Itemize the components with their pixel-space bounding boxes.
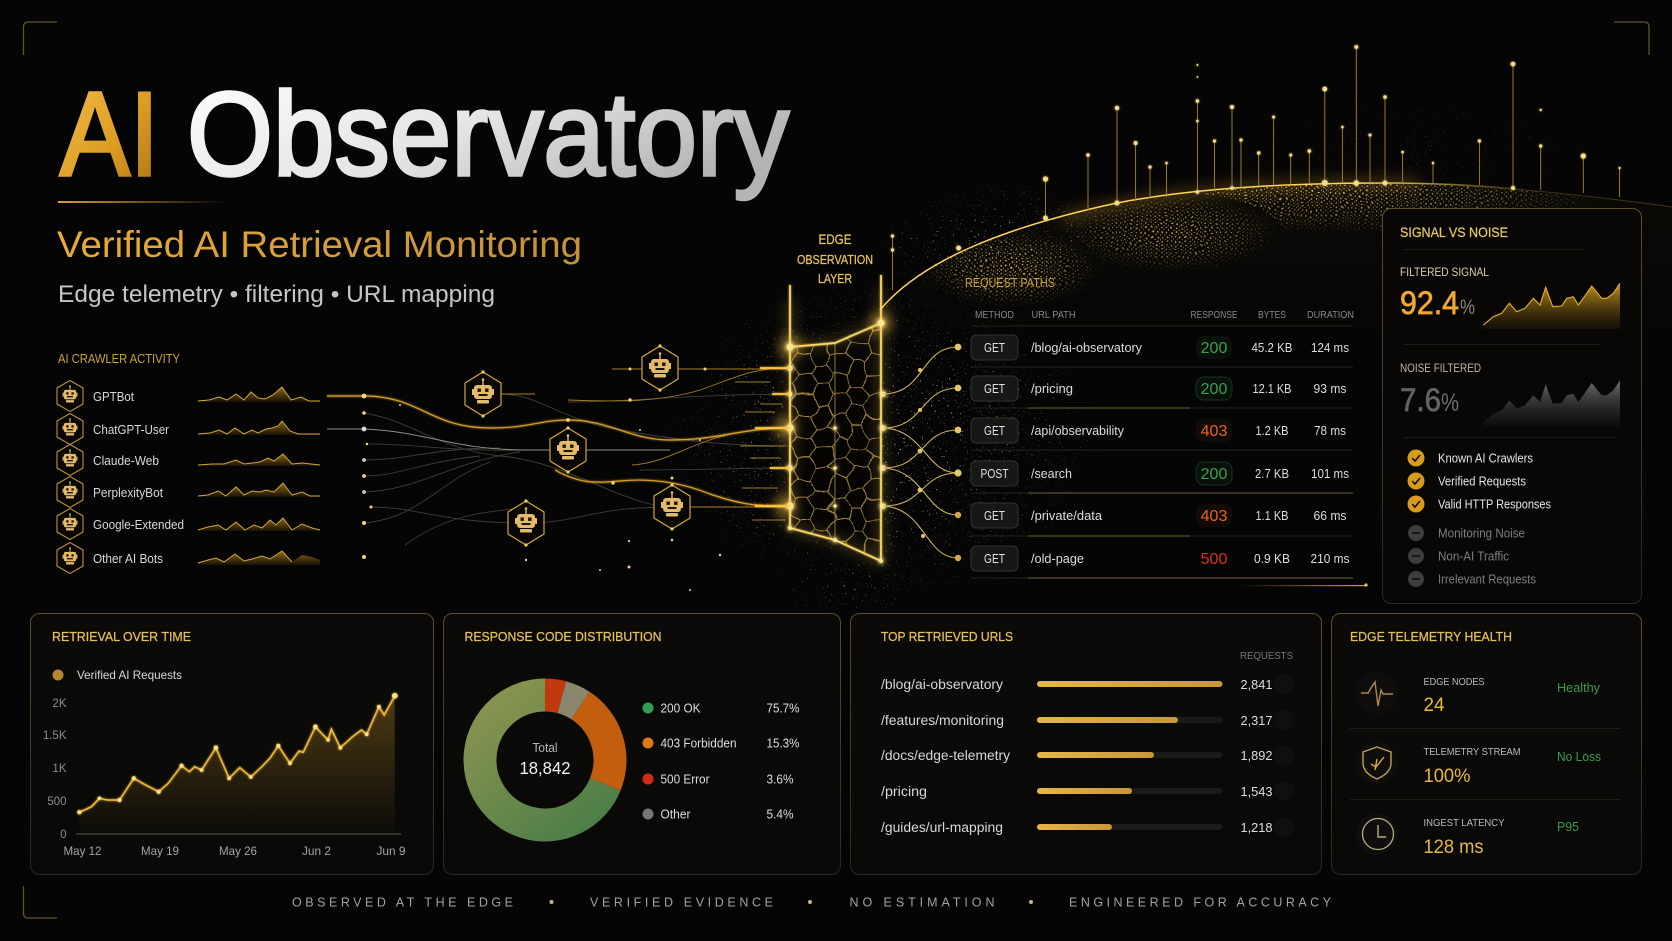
panel: response code distribution: RESPONSE CODE DISTRIBUTION bbox=[464, 629, 662, 644]
footer tagline: NO ESTIMATION bbox=[850, 896, 994, 910]
noise filtered: % bbox=[1441, 389, 1459, 417]
crawler flow lines bbox=[327, 368, 790, 545]
title: Observatory bbox=[187, 68, 789, 201]
table row 6: 210 ms bbox=[1310, 552, 1350, 566]
url row 5: /guides/url-mapping bbox=[881, 820, 1003, 835]
panel: edge telemetry health bbox=[1332, 614, 1642, 874]
crawler row: ChatGPT-User: ChatGPT-User bbox=[93, 422, 170, 437]
url row 1 bbox=[881, 674, 1294, 694]
url row 2: /features/monitoring bbox=[881, 713, 1004, 728]
donut chart bbox=[480, 695, 610, 825]
checklist: Irrelevant Requests bbox=[1438, 572, 1536, 586]
health row: ingest latency: P95 bbox=[1557, 820, 1579, 834]
filtered signal: 92.4 bbox=[1400, 285, 1459, 321]
edge observation layer label: EDGE bbox=[818, 231, 852, 247]
table row 4 bbox=[971, 461, 1349, 486]
donut legend: 75.7% bbox=[766, 702, 800, 716]
edge observation layer label: LAYER bbox=[818, 272, 852, 286]
request paths table bbox=[965, 276, 1368, 587]
table row 1: 124 ms bbox=[1311, 341, 1349, 355]
table row 4: 200 bbox=[1201, 466, 1227, 483]
table row 4: POST bbox=[980, 467, 1009, 481]
filtered signal: FILTERED SIGNAL bbox=[1400, 267, 1490, 279]
url row 2 bbox=[881, 710, 1294, 730]
panel: edge telemetry health: EDGE TELEMETRY HEALTH bbox=[1350, 629, 1512, 644]
table row 4: /search bbox=[1031, 466, 1072, 481]
health row: telemetry stream: No Loss bbox=[1557, 750, 1601, 764]
url row 1: 2,841 bbox=[1240, 677, 1272, 692]
health row: edge nodes: 24 bbox=[1424, 695, 1445, 716]
checklist: Valid HTTP Responses bbox=[1438, 498, 1551, 512]
donut legend: 5.4% bbox=[766, 808, 794, 822]
edge observation layer label: OBSERVATION bbox=[797, 253, 873, 267]
table heading: REQUEST PATHS bbox=[965, 276, 1055, 290]
y axis labels bbox=[43, 698, 67, 841]
checklist: Monitoring Noise bbox=[1438, 526, 1525, 540]
noise filtered: NOISE FILTERED bbox=[1400, 363, 1481, 375]
table row 4: 2.7 KB bbox=[1255, 467, 1289, 481]
globe horizon with data spikes bbox=[658, 44, 1672, 618]
subtitle: Verified AI Retrieval Monitoring bbox=[57, 224, 582, 265]
x axis labels: May 12 bbox=[64, 844, 102, 858]
table row 6: 500 bbox=[1201, 551, 1227, 568]
table row 3: 1.2 KB bbox=[1256, 424, 1288, 438]
health row: telemetry stream: 100% bbox=[1424, 766, 1471, 787]
table row 4: 101 ms bbox=[1311, 467, 1349, 481]
table row 5: 66 ms bbox=[1314, 509, 1346, 523]
table row 6: /old-page bbox=[1031, 551, 1084, 566]
table row 6: GET bbox=[984, 552, 1005, 566]
edge observation gate bbox=[755, 275, 895, 570]
filtered signal: % bbox=[1460, 296, 1475, 319]
health row: ingest latency: INGEST LATENCY bbox=[1424, 817, 1504, 829]
url row 4: /pricing bbox=[881, 784, 927, 799]
table row 2 bbox=[971, 376, 1346, 401]
y axis labels: 500 bbox=[47, 796, 66, 808]
donut legend: 500 Error bbox=[660, 772, 710, 786]
connectors from gate to table bbox=[883, 344, 962, 561]
panel: top retrieved urls: TOP RETRIEVED URLS bbox=[881, 629, 1013, 644]
panel: top retrieved urls: REQUESTS bbox=[1240, 650, 1293, 662]
table row 3: 403 bbox=[1201, 423, 1227, 440]
table row 1: 45.2 KB bbox=[1252, 341, 1292, 355]
table row 5: 1.1 KB bbox=[1256, 509, 1288, 523]
table column headers: RESPONSE bbox=[1190, 310, 1238, 321]
footer tagline bbox=[292, 896, 1332, 910]
tagline: Edge telemetry • filtering • URL mapping bbox=[58, 281, 495, 308]
x axis labels: May 19 bbox=[141, 844, 179, 858]
table row 2: GET bbox=[984, 382, 1005, 396]
x axis labels: May 26 bbox=[219, 844, 257, 858]
noise filtered: 7.6 bbox=[1400, 382, 1441, 418]
crawler row: PerplexityBot: PerplexityBot bbox=[93, 485, 163, 500]
y axis labels: 1.5K bbox=[43, 730, 67, 742]
legend: Verified AI Requests bbox=[77, 668, 182, 682]
donut legend: 403 Forbidden bbox=[660, 736, 737, 750]
panel: retrieval over time bbox=[30, 614, 434, 874]
table row 2: 12.1 KB bbox=[1252, 382, 1292, 396]
footer tagline: OBSERVED AT THE EDGE bbox=[292, 896, 513, 910]
donut legend bbox=[642, 702, 800, 822]
checklist bbox=[1408, 450, 1551, 587]
health row: edge nodes: Healthy bbox=[1557, 681, 1601, 695]
panel: top retrieved urls bbox=[850, 614, 1322, 874]
crawler row: Claude-Web bbox=[57, 444, 320, 476]
donut total bbox=[520, 741, 570, 778]
noise filtered bbox=[1400, 363, 1620, 426]
donut total: Total bbox=[532, 741, 558, 755]
table row 3 bbox=[971, 418, 1346, 443]
y axis labels: 2K bbox=[52, 698, 67, 710]
footer tagline: VERIFIED EVIDENCE bbox=[590, 896, 773, 910]
crawler row: Claude-Web: Claude-Web bbox=[93, 453, 159, 468]
checklist: Known AI Crawlers bbox=[1438, 452, 1533, 466]
table row 3: /api/observability bbox=[1031, 423, 1124, 438]
url row 2: 2,317 bbox=[1240, 713, 1272, 728]
line chart bbox=[76, 693, 401, 834]
table row 1 bbox=[971, 335, 1349, 360]
y axis labels: 1K bbox=[52, 763, 67, 775]
table row 5: 403 bbox=[1201, 508, 1227, 525]
table row 5: GET bbox=[984, 509, 1005, 523]
crawler row: Google-Extended bbox=[57, 508, 320, 540]
section label: AI crawler activity: AI CRAWLER ACTIVITY bbox=[58, 352, 181, 366]
table row 6: 0.9 KB bbox=[1254, 552, 1290, 566]
table row 2: 200 bbox=[1201, 381, 1227, 398]
robot hexagon nodes bbox=[465, 344, 690, 547]
title underline bbox=[58, 201, 226, 203]
donut legend: 15.3% bbox=[766, 736, 800, 750]
table row 3: GET bbox=[984, 424, 1005, 438]
url row 3 bbox=[881, 745, 1294, 765]
url row 5: 1,218 bbox=[1240, 820, 1272, 835]
health row: edge nodes: EDGE NODES bbox=[1424, 676, 1484, 688]
table row 2: /pricing bbox=[1031, 381, 1073, 396]
table row 1: GET bbox=[984, 341, 1005, 355]
health row: telemetry stream: TELEMETRY STREAM bbox=[1424, 746, 1520, 758]
title: AI bbox=[60, 68, 159, 201]
panel: signal vs noise: SIGNAL VS NOISE bbox=[1400, 225, 1508, 240]
health row: edge nodes bbox=[1356, 672, 1601, 716]
checklist: Verified Requests bbox=[1438, 474, 1526, 488]
edge observation layer label bbox=[797, 231, 873, 286]
panel: retrieval over time: RETRIEVAL OVER TIME bbox=[52, 629, 191, 644]
crawler row: ChatGPT-User bbox=[57, 414, 320, 444]
url row 4 bbox=[881, 781, 1294, 801]
table row 1: 200 bbox=[1201, 340, 1227, 357]
donut total: 18,842 bbox=[520, 758, 570, 778]
url row 3: /docs/edge-telemetry bbox=[881, 748, 1010, 763]
table row 5 bbox=[971, 503, 1346, 528]
footer tagline: ENGINEERED FOR ACCURACY bbox=[1069, 896, 1332, 910]
table column headers: URL PATH bbox=[1032, 310, 1076, 321]
donut legend: Other bbox=[660, 808, 690, 822]
panel: response code distribution bbox=[444, 614, 840, 874]
table row 2: 93 ms bbox=[1314, 382, 1346, 396]
crawler row: GPTBot bbox=[57, 380, 320, 412]
crawler row: PerplexityBot bbox=[57, 476, 320, 508]
filtered signal bbox=[1400, 267, 1620, 329]
table row 6 bbox=[971, 546, 1350, 571]
donut legend: 3.6% bbox=[766, 772, 794, 786]
url row 1: /blog/ai-observatory bbox=[881, 677, 1003, 692]
donut legend: 200 OK bbox=[660, 702, 701, 716]
table row 1: /blog/ai-observatory bbox=[1031, 340, 1142, 355]
health row: telemetry stream bbox=[1356, 742, 1601, 787]
url row 5 bbox=[881, 817, 1294, 837]
panel: signal vs noise bbox=[1382, 208, 1642, 604]
x axis labels: Jun 9 bbox=[376, 844, 406, 858]
health row: ingest latency bbox=[1356, 813, 1579, 858]
y axis labels: 0 bbox=[60, 829, 66, 841]
url row 3: 1,892 bbox=[1240, 748, 1272, 763]
table column headers: BYTES bbox=[1258, 310, 1286, 321]
crawler row: Other AI Bots bbox=[57, 542, 320, 574]
x axis labels: Jun 2 bbox=[302, 844, 331, 858]
crawler row: Google-Extended: Google-Extended bbox=[93, 517, 184, 532]
health row: ingest latency: 128 ms bbox=[1424, 837, 1484, 858]
table column headers: DURATION bbox=[1307, 310, 1354, 321]
x axis labels bbox=[64, 844, 406, 858]
flow nodes bbox=[362, 368, 721, 591]
table row 5: /private/data bbox=[1031, 508, 1103, 523]
checklist: Non-AI Traffic bbox=[1438, 550, 1509, 564]
table row 3: 78 ms bbox=[1314, 424, 1346, 438]
table column headers bbox=[975, 310, 1354, 321]
url row 4: 1,543 bbox=[1240, 784, 1272, 799]
table column headers: METHOD bbox=[975, 310, 1014, 321]
crawler row: Other AI Bots: Other AI Bots bbox=[93, 551, 163, 566]
crawler row: GPTBot: GPTBot bbox=[93, 389, 134, 404]
